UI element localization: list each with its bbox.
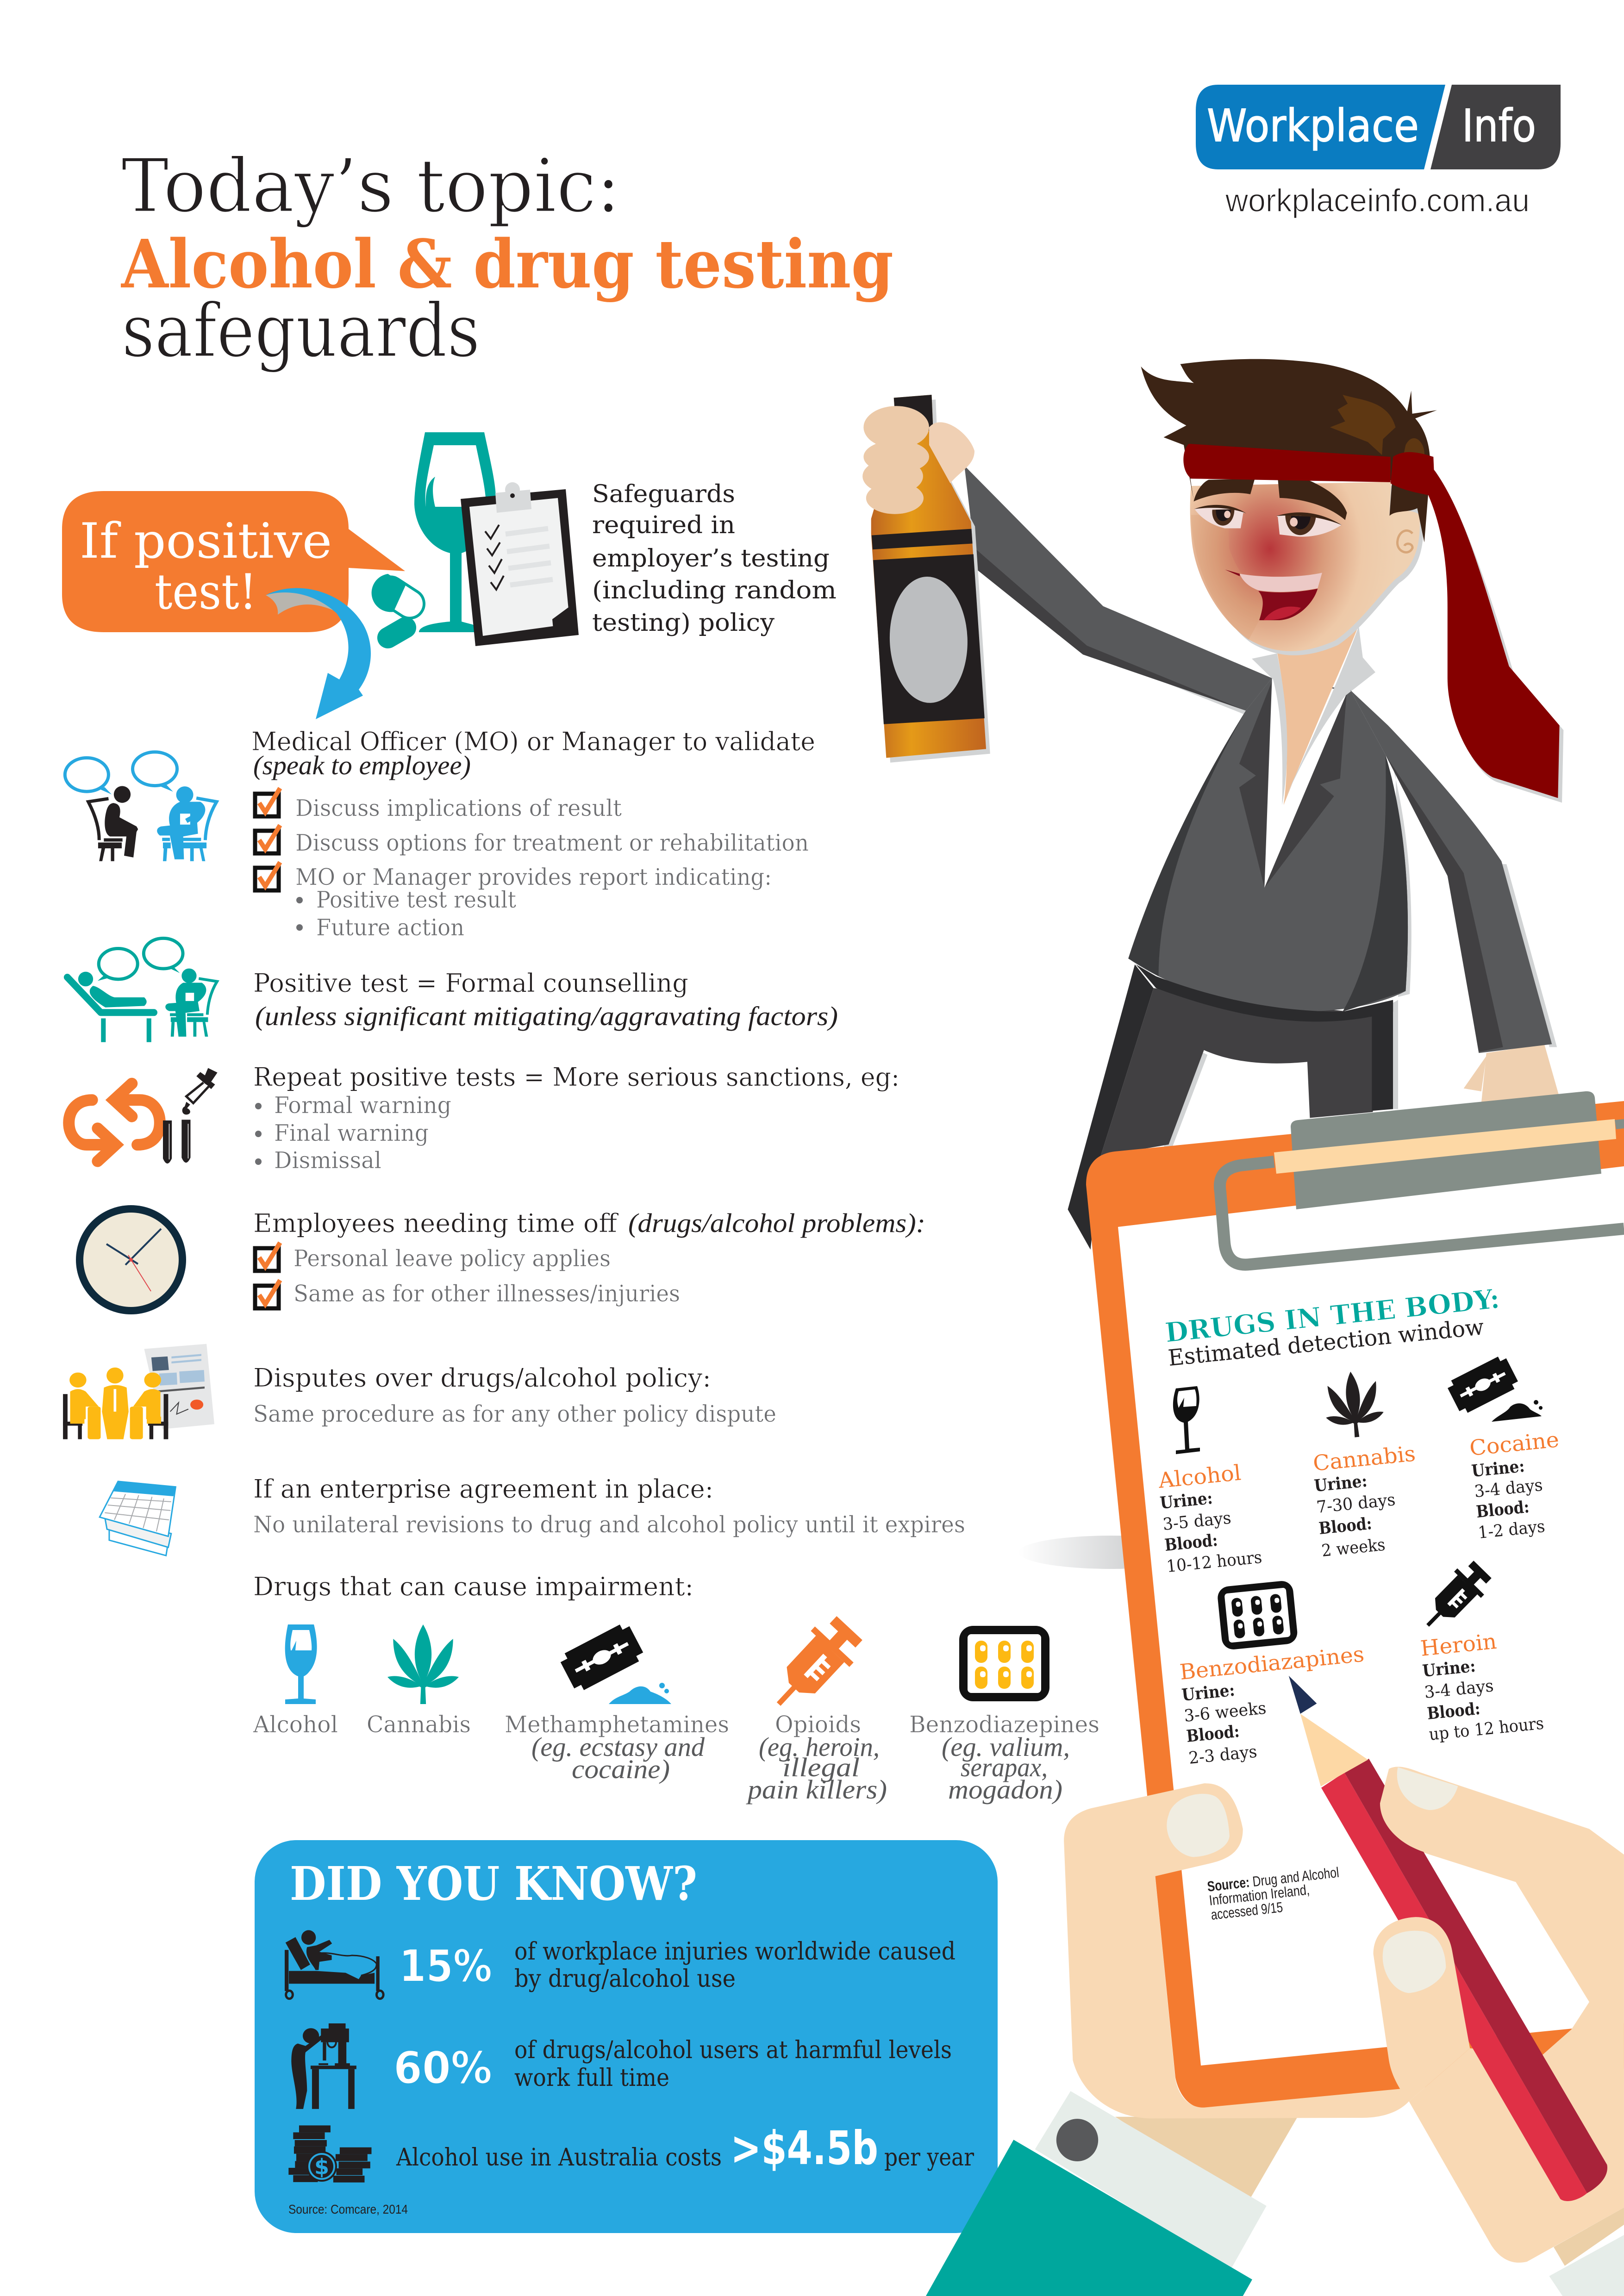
stat: 60 percent: work full time xyxy=(514,2064,669,2092)
bottle xyxy=(871,395,990,763)
text block: repeat positive tests: Dismissal xyxy=(274,1147,381,1174)
hair and headband xyxy=(1141,359,1437,542)
detection: cannabis: 2 weeks xyxy=(1321,1535,1386,1561)
drug: benzodiazepines: serapax, xyxy=(961,1752,1048,1782)
text block: repeat positive tests: Final warning xyxy=(274,1120,429,1146)
eyebrows xyxy=(1193,479,1347,520)
text block: formal counselling: (unless significant mitigating/aggravating factors) xyxy=(255,1001,838,1031)
text block: medical officer: MO or Manager provides report indicating: xyxy=(295,864,772,890)
icon: coin stacks xyxy=(288,2125,371,2183)
text block: medical officer: (speak to employee) xyxy=(253,750,471,780)
drug: opioids: Opioids xyxy=(775,1711,861,1738)
text block: medical officer: Discuss options for treatment or rehabilitation xyxy=(295,829,809,856)
text block: time off: (drugs/alcohol problems): xyxy=(628,1208,925,1238)
pencil xyxy=(1289,1676,1607,2201)
stat: 60 percent xyxy=(394,2036,952,2094)
drug: methamphetamines: Methamphetamines xyxy=(505,1711,729,1738)
icon: hospital bed xyxy=(285,1930,383,1999)
speech bubble: If positive test!: test! xyxy=(155,564,257,620)
text block: medical officer xyxy=(251,727,815,941)
detection: cannabis: 7-30 days xyxy=(1316,1490,1396,1517)
logo: Workplace Info: Info xyxy=(1462,100,1536,152)
text block: time off: Same as for other illnesses/injuries xyxy=(294,1280,680,1307)
drug: opioids xyxy=(746,1610,887,1804)
icon: clock xyxy=(76,1205,186,1314)
text: safeguards required: (including random xyxy=(592,577,837,604)
detection: benzodiazapines: Benzodiazapines xyxy=(1179,1641,1365,1685)
text block: medical officer: Discuss implications of result xyxy=(295,795,622,821)
heading: did you know: DID YOU KNOW? xyxy=(290,1856,697,1911)
text: safeguards required: Safeguards xyxy=(592,480,735,508)
text block: disputes xyxy=(253,1363,776,1427)
trousers xyxy=(1068,964,1398,1250)
title: Today’s topic: xyxy=(121,143,620,229)
clipboard heading: Estimated detection window xyxy=(1167,1314,1485,1371)
detection: benzodiazapines: Blood: xyxy=(1186,1722,1240,1746)
text block: time off xyxy=(253,1208,925,1308)
title: safeguards xyxy=(122,287,480,374)
text block: enterprise agreement xyxy=(253,1474,965,1538)
text block: repeat positive tests xyxy=(253,1062,899,1174)
detection: alcohol: Blood: xyxy=(1164,1531,1218,1555)
drug: opioids: illegal xyxy=(782,1752,860,1782)
source: drug and alcohol information xyxy=(1206,1864,1340,1923)
text block: medical officer: Positive test result xyxy=(316,886,516,913)
left arm and cuff xyxy=(926,2091,1298,2296)
necktie headband tail xyxy=(1428,466,1563,803)
detection: cocaine xyxy=(1445,1354,1560,1543)
fingers over pencil xyxy=(1374,1767,1470,2101)
stat: 15 percent: 15% xyxy=(399,1941,492,1992)
right arm and cuff xyxy=(1549,2208,1624,2296)
detection: alcohol: 10-12 hours xyxy=(1166,1548,1263,1576)
drug: cannabis: Cannabis xyxy=(367,1711,471,1738)
raised arm xyxy=(964,466,1276,716)
ear xyxy=(1397,530,1412,552)
title xyxy=(120,143,893,374)
detection: heroin: Urine: xyxy=(1422,1656,1476,1681)
drug: benzodiazepines: (eg. valium, xyxy=(942,1732,1070,1762)
detection: heroin xyxy=(1414,1556,1545,1744)
detection: cocaine: Blood: xyxy=(1475,1497,1530,1522)
illustration: hands holding clipboard and pencil xyxy=(926,1676,1624,2296)
detection: alcohol: 3-5 days xyxy=(1162,1508,1232,1534)
panel: did you know xyxy=(255,1840,998,2233)
icon: wine glass, pills and checklist xyxy=(370,432,579,652)
eyes xyxy=(1194,506,1246,528)
speech bubble: If positive test!: If positive xyxy=(80,513,332,569)
stat: 15 percent: by drug/alcohol use xyxy=(514,1965,736,1993)
detection: benzodiazapines: 3-6 weeks xyxy=(1183,1699,1267,1726)
text block: medical officer: Medical Officer (MO) or Manager to validate xyxy=(251,727,815,756)
text block: disputes: Disputes over drugs/alcohol policy: xyxy=(253,1363,711,1393)
detection: heroin: Blood: xyxy=(1426,1699,1481,1724)
text block: formal counselling: Positive test = Formal counselling xyxy=(253,968,688,998)
drug: cannabis xyxy=(367,1624,471,1738)
text: safeguards required: employer’s testing xyxy=(592,545,830,572)
detection: alcohol: Alcohol xyxy=(1157,1460,1242,1493)
text block: formal counselling xyxy=(253,968,838,1031)
clipboard clamp xyxy=(1220,1091,1624,1265)
drug: opioids: pain killers) xyxy=(746,1774,887,1804)
stat: alcohol cost: >$4.5b xyxy=(731,2121,878,2175)
right hand xyxy=(1380,1767,1624,2263)
icon: man at machine xyxy=(291,2023,356,2109)
text block: time off: Employees needing time off xyxy=(253,1208,619,1238)
text block: repeat positive tests: Repeat positive tests = More serious sanctions, eg: xyxy=(253,1062,899,1092)
icon: repeat arrows and test tubes xyxy=(69,1068,218,1164)
detection: benzodiazapines: 2-3 days xyxy=(1188,1742,1258,1768)
detection: benzodiazapines: Urine: xyxy=(1181,1680,1236,1705)
text: safeguards required xyxy=(592,480,837,637)
source: comcare: Source: Comcare, 2014 xyxy=(288,2202,408,2216)
detection: alcohol: Urine: xyxy=(1159,1488,1213,1513)
stat: alcohol cost xyxy=(396,2121,974,2175)
detection: cannabis: Cannabis xyxy=(1312,1441,1417,1476)
detection: cocaine: Urine: xyxy=(1471,1456,1525,1481)
detection: cannabis xyxy=(1312,1369,1417,1561)
logo: Workplace Info: workplaceinfo.com.au xyxy=(1225,182,1530,218)
drug: methamphetamines: (eg. ecstasy and xyxy=(531,1732,705,1762)
clipboard xyxy=(1086,1091,1624,2108)
detection: heroin: 3-4 days xyxy=(1424,1676,1494,1702)
source: drug and alcohol information: accessed 9/15 xyxy=(1210,1899,1284,1923)
detection: alcohol xyxy=(1157,1386,1263,1576)
stat: 60 percent: 60% xyxy=(394,2043,492,2094)
drug: benzodiazepines: mogadon) xyxy=(948,1774,1062,1804)
clipboard heading: DRUGS IN THE BODY: xyxy=(1163,1283,1501,1349)
drug: alcohol xyxy=(253,1624,338,1738)
detection: heroin: up to 12 hours xyxy=(1428,1714,1545,1744)
left hand xyxy=(1064,1783,1409,2118)
drug: methamphetamines: cocaine) xyxy=(572,1754,670,1784)
text block: enterprise agreement: If an enterprise agreement in place: xyxy=(253,1474,713,1504)
mouth xyxy=(1240,572,1322,592)
jacket xyxy=(1128,625,1412,1021)
source: drug and alcohol information: Source: Drug and Alcohol xyxy=(1206,1864,1340,1895)
speech bubble: If positive test! xyxy=(62,491,405,632)
text block: repeat positive tests: Formal warning xyxy=(274,1092,451,1119)
heading: drugs that can cause impairment: Drugs that can cause impairment: xyxy=(253,1572,693,1601)
detection: cocaine: 1-2 days xyxy=(1477,1517,1546,1543)
stat: 60 percent: of drugs/alcohol users at harmful levels xyxy=(514,2036,952,2064)
text block: time off: Personal leave policy applies xyxy=(294,1245,611,1272)
arrow: curved blue arrow xyxy=(266,588,371,719)
icon: coin stacks: $ xyxy=(314,2154,329,2179)
text: safeguards required: testing) policy xyxy=(592,609,775,637)
logo: Workplace Info: Workplace xyxy=(1207,100,1419,152)
stat: 15 percent: of workplace injuries worldwide caused xyxy=(514,1938,956,1966)
source: drug and alcohol information: Information Ireland, xyxy=(1208,1881,1310,1909)
drug: benzodiazepines xyxy=(909,1626,1099,1804)
drug: benzodiazepines: Benzodiazepines xyxy=(909,1711,1099,1738)
right arm and hand xyxy=(1350,690,1560,1103)
detection: cocaine: Cocaine xyxy=(1468,1427,1560,1461)
detection: cannabis: Blood: xyxy=(1318,1514,1373,1538)
stat: alcohol cost: Alcohol use in Australia costs xyxy=(396,2144,722,2172)
shadow under clipboard xyxy=(1018,1536,1204,1569)
text: safeguards required: required in xyxy=(592,511,735,539)
character: drunk man with bottle xyxy=(862,359,1563,1250)
icon: counselling session xyxy=(67,938,217,1042)
detection: cocaine: 3-4 days xyxy=(1474,1475,1543,1501)
head and face xyxy=(1190,479,1430,655)
logo: Workplace Info xyxy=(1196,85,1561,218)
title: Alcohol & drug testing xyxy=(120,225,893,303)
detection: heroin: Heroin xyxy=(1419,1629,1498,1661)
drug: alcohol: Alcohol xyxy=(253,1711,338,1738)
detection: cannabis: Urine: xyxy=(1313,1471,1368,1496)
stat: 15 percent xyxy=(399,1938,956,1993)
text block: disputes: Same procedure as for any other policy dispute xyxy=(253,1400,776,1427)
drug: methamphetamines xyxy=(505,1621,729,1784)
icon: two people talking xyxy=(65,752,217,861)
bottle hand xyxy=(862,406,974,514)
drug: opioids: (eg. heroin, xyxy=(759,1732,880,1762)
text block: enterprise agreement: No unilateral revisions to drug and alcohol policy until it expires xyxy=(253,1511,965,1538)
stat: alcohol cost: per year xyxy=(884,2144,974,2172)
text block: medical officer: Future action xyxy=(316,914,464,941)
detection: benzodiazapines xyxy=(1179,1580,1365,1768)
icon: calendar xyxy=(100,1481,175,1556)
icon: dispute meeting xyxy=(63,1344,214,1439)
